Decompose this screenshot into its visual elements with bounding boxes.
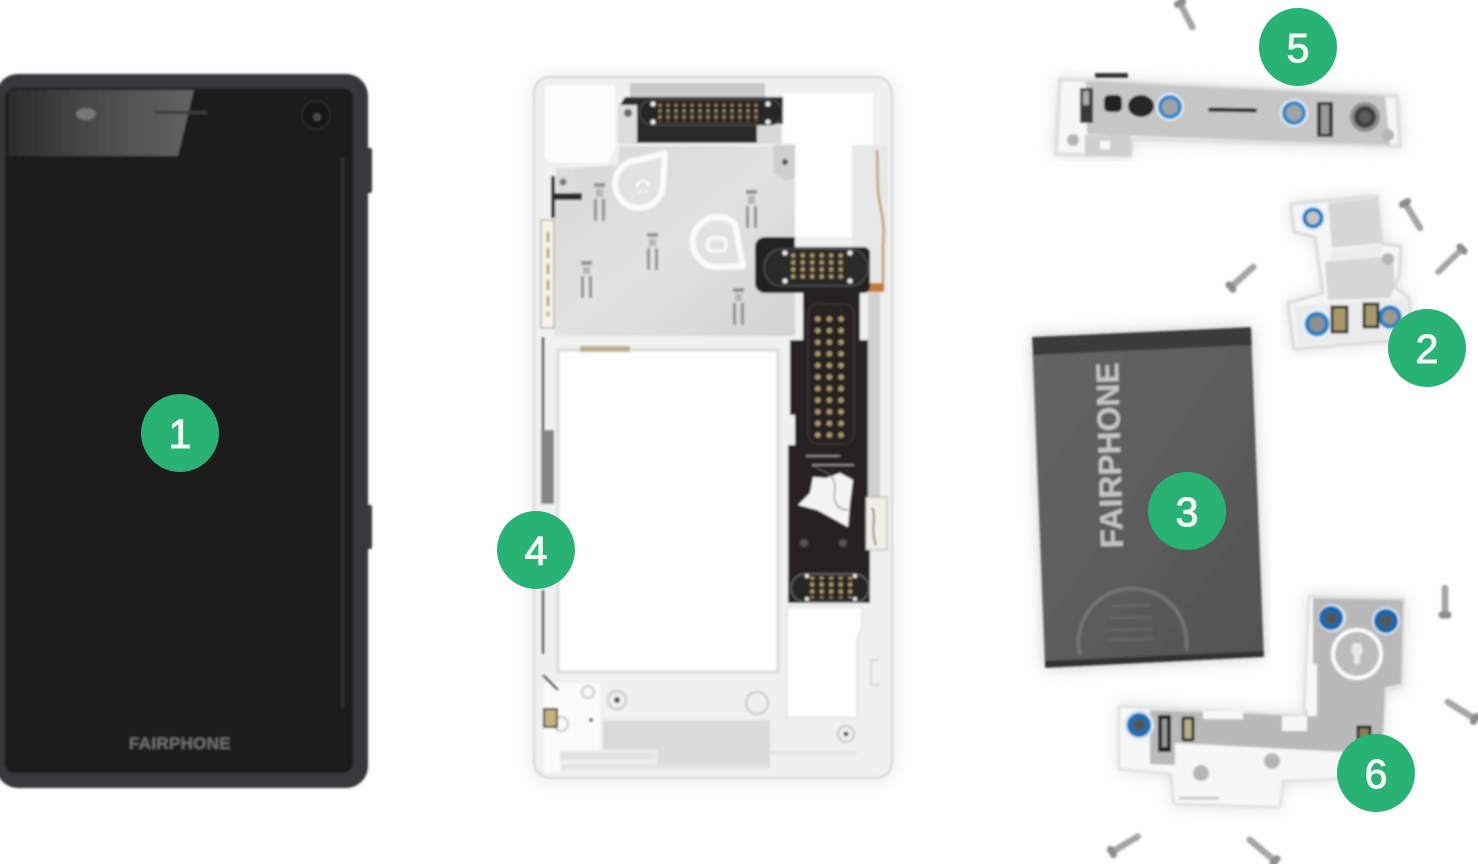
right connector board xyxy=(755,237,870,293)
right strip xyxy=(852,145,888,295)
panel: module 2 xyxy=(1287,195,1413,350)
phone screen xyxy=(22,157,343,708)
module base xyxy=(1288,196,1412,349)
microphone ring xyxy=(1333,630,1381,678)
module base xyxy=(1119,596,1404,807)
frame body xyxy=(534,77,892,778)
badge 4 xyxy=(497,511,575,589)
panel: camera module 5 xyxy=(1053,73,1402,157)
left plate xyxy=(618,105,638,144)
screen glare xyxy=(8,90,194,156)
mounting hole xyxy=(1382,253,1394,265)
gold connector xyxy=(544,709,557,727)
badge 3 xyxy=(1148,472,1226,550)
pin bed outline xyxy=(808,304,854,444)
plate white notch b xyxy=(1282,716,1307,731)
battery seal circle xyxy=(1079,588,1187,655)
badge 3: 3 xyxy=(1176,489,1198,535)
front camera xyxy=(302,101,330,129)
screw far right xyxy=(1446,699,1477,722)
battery contacts xyxy=(580,346,630,352)
shield slots xyxy=(581,183,757,325)
shield tab xyxy=(773,145,795,181)
battery top band xyxy=(1032,327,1252,355)
module shadow xyxy=(1287,195,1413,350)
plate white notch a xyxy=(1203,711,1243,719)
frame holes xyxy=(554,686,854,742)
tab slot xyxy=(1100,141,1110,149)
microphone glyph xyxy=(1351,643,1363,664)
right plate xyxy=(757,124,781,144)
black lens xyxy=(1128,95,1154,117)
badge 5 xyxy=(1259,8,1337,86)
screw upper right 2 xyxy=(1436,247,1464,274)
black sensor xyxy=(1104,95,1122,112)
white ring 2 xyxy=(693,217,743,267)
connector board dark xyxy=(620,97,783,143)
blue screw a xyxy=(1318,604,1346,632)
shield seam xyxy=(1330,245,1382,261)
right connector xyxy=(1317,102,1333,137)
black side clip xyxy=(551,176,582,218)
copper flex tab xyxy=(866,283,884,292)
connector oval xyxy=(640,100,782,125)
screws xyxy=(1110,2,1477,863)
lower gray recess xyxy=(603,720,770,768)
screw top xyxy=(1177,2,1195,28)
top right window xyxy=(783,93,873,237)
badge 4: 4 xyxy=(525,528,547,574)
connector long xyxy=(1158,715,1171,752)
frame shadow xyxy=(530,76,895,782)
screw bottom xyxy=(1248,837,1277,863)
blue screw c xyxy=(1124,710,1154,740)
left gray strip xyxy=(541,430,554,504)
plate white notch c xyxy=(1307,664,1317,716)
blue screw bottom right xyxy=(1376,303,1404,331)
blue screw bottom left xyxy=(1302,309,1332,339)
lower tab xyxy=(1085,135,1131,156)
gray plate xyxy=(1086,81,1390,145)
gold connector left xyxy=(1332,307,1347,332)
screw bottom left xyxy=(1110,834,1139,855)
connector right xyxy=(1358,727,1370,747)
bottom connector xyxy=(791,574,869,602)
lower right window xyxy=(787,607,862,718)
phone side buttons xyxy=(364,148,372,549)
corner pads xyxy=(650,102,770,124)
screw middle xyxy=(1229,265,1255,289)
white ring 1 xyxy=(615,153,665,208)
board small text xyxy=(806,456,854,465)
small tab xyxy=(556,168,573,192)
panel: module 6 xyxy=(1118,595,1405,808)
copper cable xyxy=(877,150,884,290)
badge 6 xyxy=(1337,734,1415,812)
module shadow xyxy=(1053,78,1402,157)
corner pads xyxy=(782,250,852,284)
small print xyxy=(1179,797,1219,800)
mounting holes xyxy=(1193,753,1280,781)
blue screw top xyxy=(1300,205,1326,231)
right edge details xyxy=(866,293,887,685)
blue screw right xyxy=(1280,99,1308,127)
metal shield xyxy=(555,146,795,336)
oval outline xyxy=(764,249,868,286)
phone body xyxy=(0,74,368,788)
top connector board xyxy=(618,97,783,144)
badge 5: 5 xyxy=(1287,25,1309,71)
board hole left xyxy=(800,539,808,547)
screw upper right 1 xyxy=(1402,201,1423,229)
badge 1 xyxy=(141,394,219,472)
dark board xyxy=(755,237,870,293)
badge 2: 2 xyxy=(1416,326,1438,372)
frame bottom lip xyxy=(560,751,857,769)
panel: phone frame and core module 4 xyxy=(530,76,895,782)
pins xyxy=(809,577,853,598)
earpiece sensors xyxy=(76,108,207,120)
top dark clip xyxy=(1095,73,1128,78)
phone front glass xyxy=(5,88,353,773)
badge 1: 1 xyxy=(169,411,191,457)
screen edge highlight xyxy=(341,157,344,708)
gold connector right xyxy=(1364,304,1378,327)
battery seal text lines xyxy=(1109,605,1153,640)
map river xyxy=(813,465,848,510)
corner pads xyxy=(805,574,857,601)
battery window xyxy=(558,350,778,672)
gray plate xyxy=(1150,598,1403,765)
blue screw left xyxy=(1156,93,1184,121)
central main board xyxy=(788,293,870,603)
pins xyxy=(788,253,845,281)
top gray bar xyxy=(630,83,765,98)
left black wire xyxy=(543,337,558,690)
battery bottom edge xyxy=(1045,651,1264,668)
earpiece slit xyxy=(1208,108,1257,112)
mounting holes xyxy=(1067,129,1394,146)
battery logo text: FAIRPHONE xyxy=(1089,362,1130,549)
left strip xyxy=(541,220,554,328)
rear camera xyxy=(1350,102,1380,132)
lower band xyxy=(1295,298,1409,346)
panel: assembled phone, module 1 xyxy=(0,74,372,788)
blue screw b xyxy=(1372,607,1400,635)
phone logo text: FAIRPHONE xyxy=(129,734,231,753)
lower shield xyxy=(1325,256,1395,300)
left connector xyxy=(1080,88,1093,123)
panel: battery module 3 xyxy=(1032,327,1264,668)
upper shield xyxy=(1328,198,1381,248)
congo map xyxy=(798,473,853,527)
connector gold xyxy=(1183,718,1193,740)
battery body xyxy=(1032,327,1264,668)
module base xyxy=(1056,79,1400,156)
top left window xyxy=(545,85,615,163)
main board pins xyxy=(814,310,849,438)
badge 2 xyxy=(1388,309,1466,387)
badge 6: 6 xyxy=(1365,751,1387,797)
screw right lower xyxy=(1442,588,1448,615)
board hole right xyxy=(839,539,847,547)
frame screw dots xyxy=(589,697,848,736)
connector pins xyxy=(656,104,760,122)
battery shadow xyxy=(1032,327,1264,668)
white corner block xyxy=(544,683,600,772)
module shadow xyxy=(1118,595,1405,808)
oval xyxy=(791,574,869,602)
